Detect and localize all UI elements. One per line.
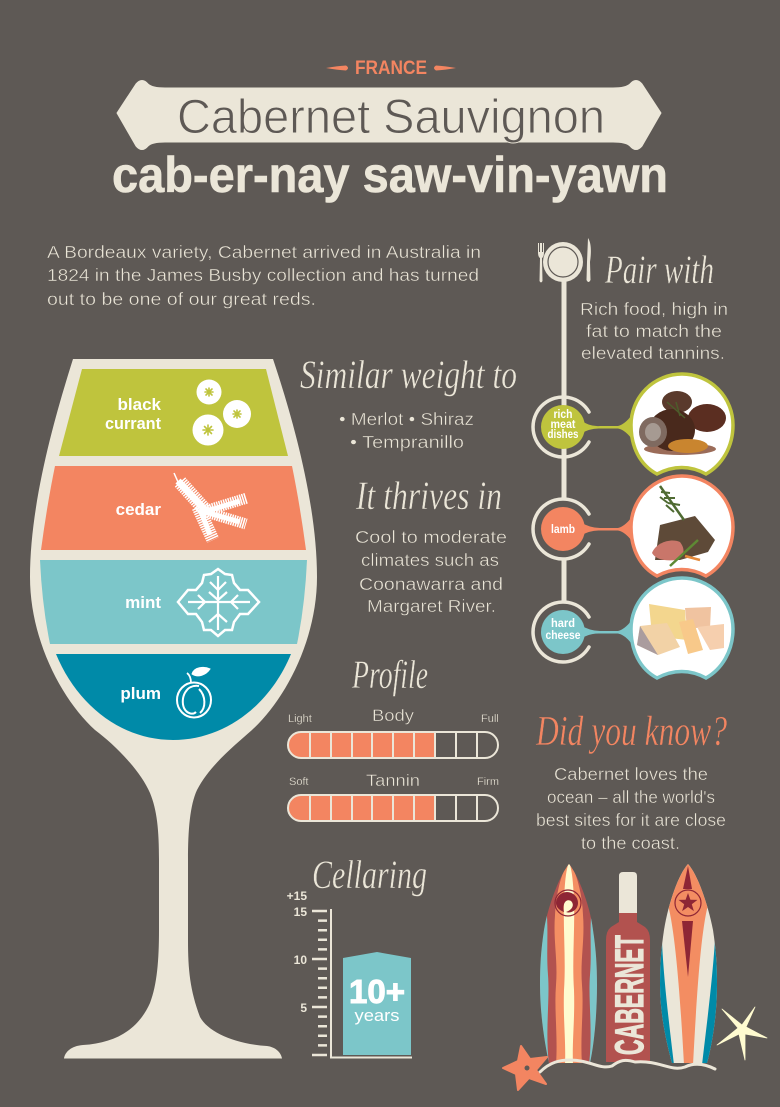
pairing: hard cheese: hard: [551, 616, 575, 630]
gauge: body: [288, 706, 499, 758]
bar: 10+ years: years: [354, 1006, 400, 1025]
gauge: tannin: Soft: [289, 776, 309, 788]
layer: black currant: black: [118, 395, 162, 414]
bar: 10+ years: 10+: [349, 973, 405, 1010]
icon: cedar branch: [174, 473, 247, 540]
gauge: tannin: Firm: [477, 776, 499, 788]
gauge: tannin: [288, 771, 499, 821]
layer: cedar: [41, 466, 306, 550]
heading: France: [326, 57, 456, 79]
pairing: hard cheese: cheese: [546, 628, 581, 642]
text: pairing advice: Rich food, high in: [580, 299, 728, 319]
text: did you know: [536, 764, 726, 853]
heading: It thrives in: It thrives in: [355, 473, 502, 518]
text: did you know: to the coast.: [581, 833, 680, 853]
icon: berries: [192, 380, 251, 446]
starfish: orange: [503, 1046, 547, 1090]
food bubble: meat: [631, 374, 733, 474]
heading: Profile: Profile: [351, 652, 428, 697]
layer: plum: [56, 654, 291, 740]
illustration: surfboards and bottle: [503, 860, 767, 1090]
heading: Similar weight to: Similar weight to: [300, 352, 517, 397]
text: pairing advice: [580, 299, 728, 363]
intro text: [47, 242, 481, 309]
layer: black currant: [59, 369, 288, 456]
layer: mint: [40, 560, 307, 644]
bottle: CABERNET: [608, 935, 652, 1055]
text: climates: [355, 527, 507, 616]
layer: black currant: currant: [105, 414, 161, 433]
pairing: rich meat dishes: rich: [554, 407, 572, 421]
list: similar varieties: [339, 409, 474, 452]
text: did you know: ocean – all the world's: [547, 787, 715, 807]
chart: cellaring: 15: [294, 905, 307, 919]
chart: cellaring: [287, 889, 412, 1058]
icon: plate and cutlery: [538, 238, 591, 400]
chart: cellaring: +15: [287, 889, 307, 903]
starfish: cream: [717, 1007, 767, 1060]
chart: cellaring: 10: [294, 953, 307, 967]
heading: France: FRANCE: [355, 57, 427, 79]
gauge: body: Full: [481, 713, 499, 725]
gauge: body: Light: [288, 713, 312, 725]
layer: mint: mint: [125, 593, 161, 612]
title banner: Cabernet Sauvignon: Cabernet Sauvignon: [177, 91, 605, 144]
connector line: [562, 400, 566, 602]
heading: Cellaring: Cellaring: [312, 852, 427, 897]
gauge: body: Body: [372, 706, 415, 725]
surfboard: right: [660, 864, 717, 1063]
intro text: A Bordeaux variety, Cabernet arrived in Australia in: [47, 242, 481, 262]
intro text: 1824 in the James Busby collection and has turned: [47, 265, 479, 285]
text: pairing advice: fat to match the: [586, 321, 722, 341]
wine glass: [30, 359, 317, 1058]
pronunciation: cab-er-nay saw-vin-yawn: [112, 147, 668, 203]
food bubble: lamb: [631, 476, 733, 576]
layer: cedar: cedar: [116, 500, 161, 519]
pairing: rich meat dishes: meat: [550, 417, 576, 431]
pairing: hard cheese: [533, 578, 733, 678]
pairing: rich meat dishes: dishes: [548, 427, 579, 441]
list: similar varieties: • Tempranillo: [350, 432, 464, 452]
food bubble: cheese: [631, 578, 733, 678]
bar: 10+ years: [343, 952, 411, 1055]
wave line: [540, 1060, 715, 1072]
pairing: lamb: lamb: [551, 522, 575, 536]
gauge: tannin: Tannin: [366, 771, 420, 790]
text: did you know: best sites for it are close: [536, 810, 726, 830]
chart: cellaring: 5: [300, 1001, 307, 1015]
text: did you know: Cabernet loves the: [554, 764, 708, 784]
layer: plum: plum: [120, 684, 161, 703]
intro text: out to be one of our great reds.: [47, 289, 316, 309]
text: climates: climates such as: [361, 550, 499, 570]
list: similar varieties: • Merlot • Shiraz: [339, 409, 474, 429]
icon: mint leaf: [178, 569, 259, 636]
pairing: lamb: [533, 476, 733, 576]
text: climates: Coonawarra and: [359, 574, 503, 594]
title banner: Cabernet Sauvignon: [117, 80, 661, 150]
text: climates: Cool to moderate: [355, 527, 507, 547]
text: climates: Margaret River.: [367, 596, 496, 616]
pairing: rich meat dishes: [533, 374, 733, 474]
icon: plum: [177, 667, 211, 718]
heading: Pair with: Pair with: [604, 247, 714, 292]
glass outline: [30, 359, 317, 1058]
text: pairing advice: elevated tannins.: [581, 343, 725, 363]
surfboard: left: [540, 864, 597, 1063]
